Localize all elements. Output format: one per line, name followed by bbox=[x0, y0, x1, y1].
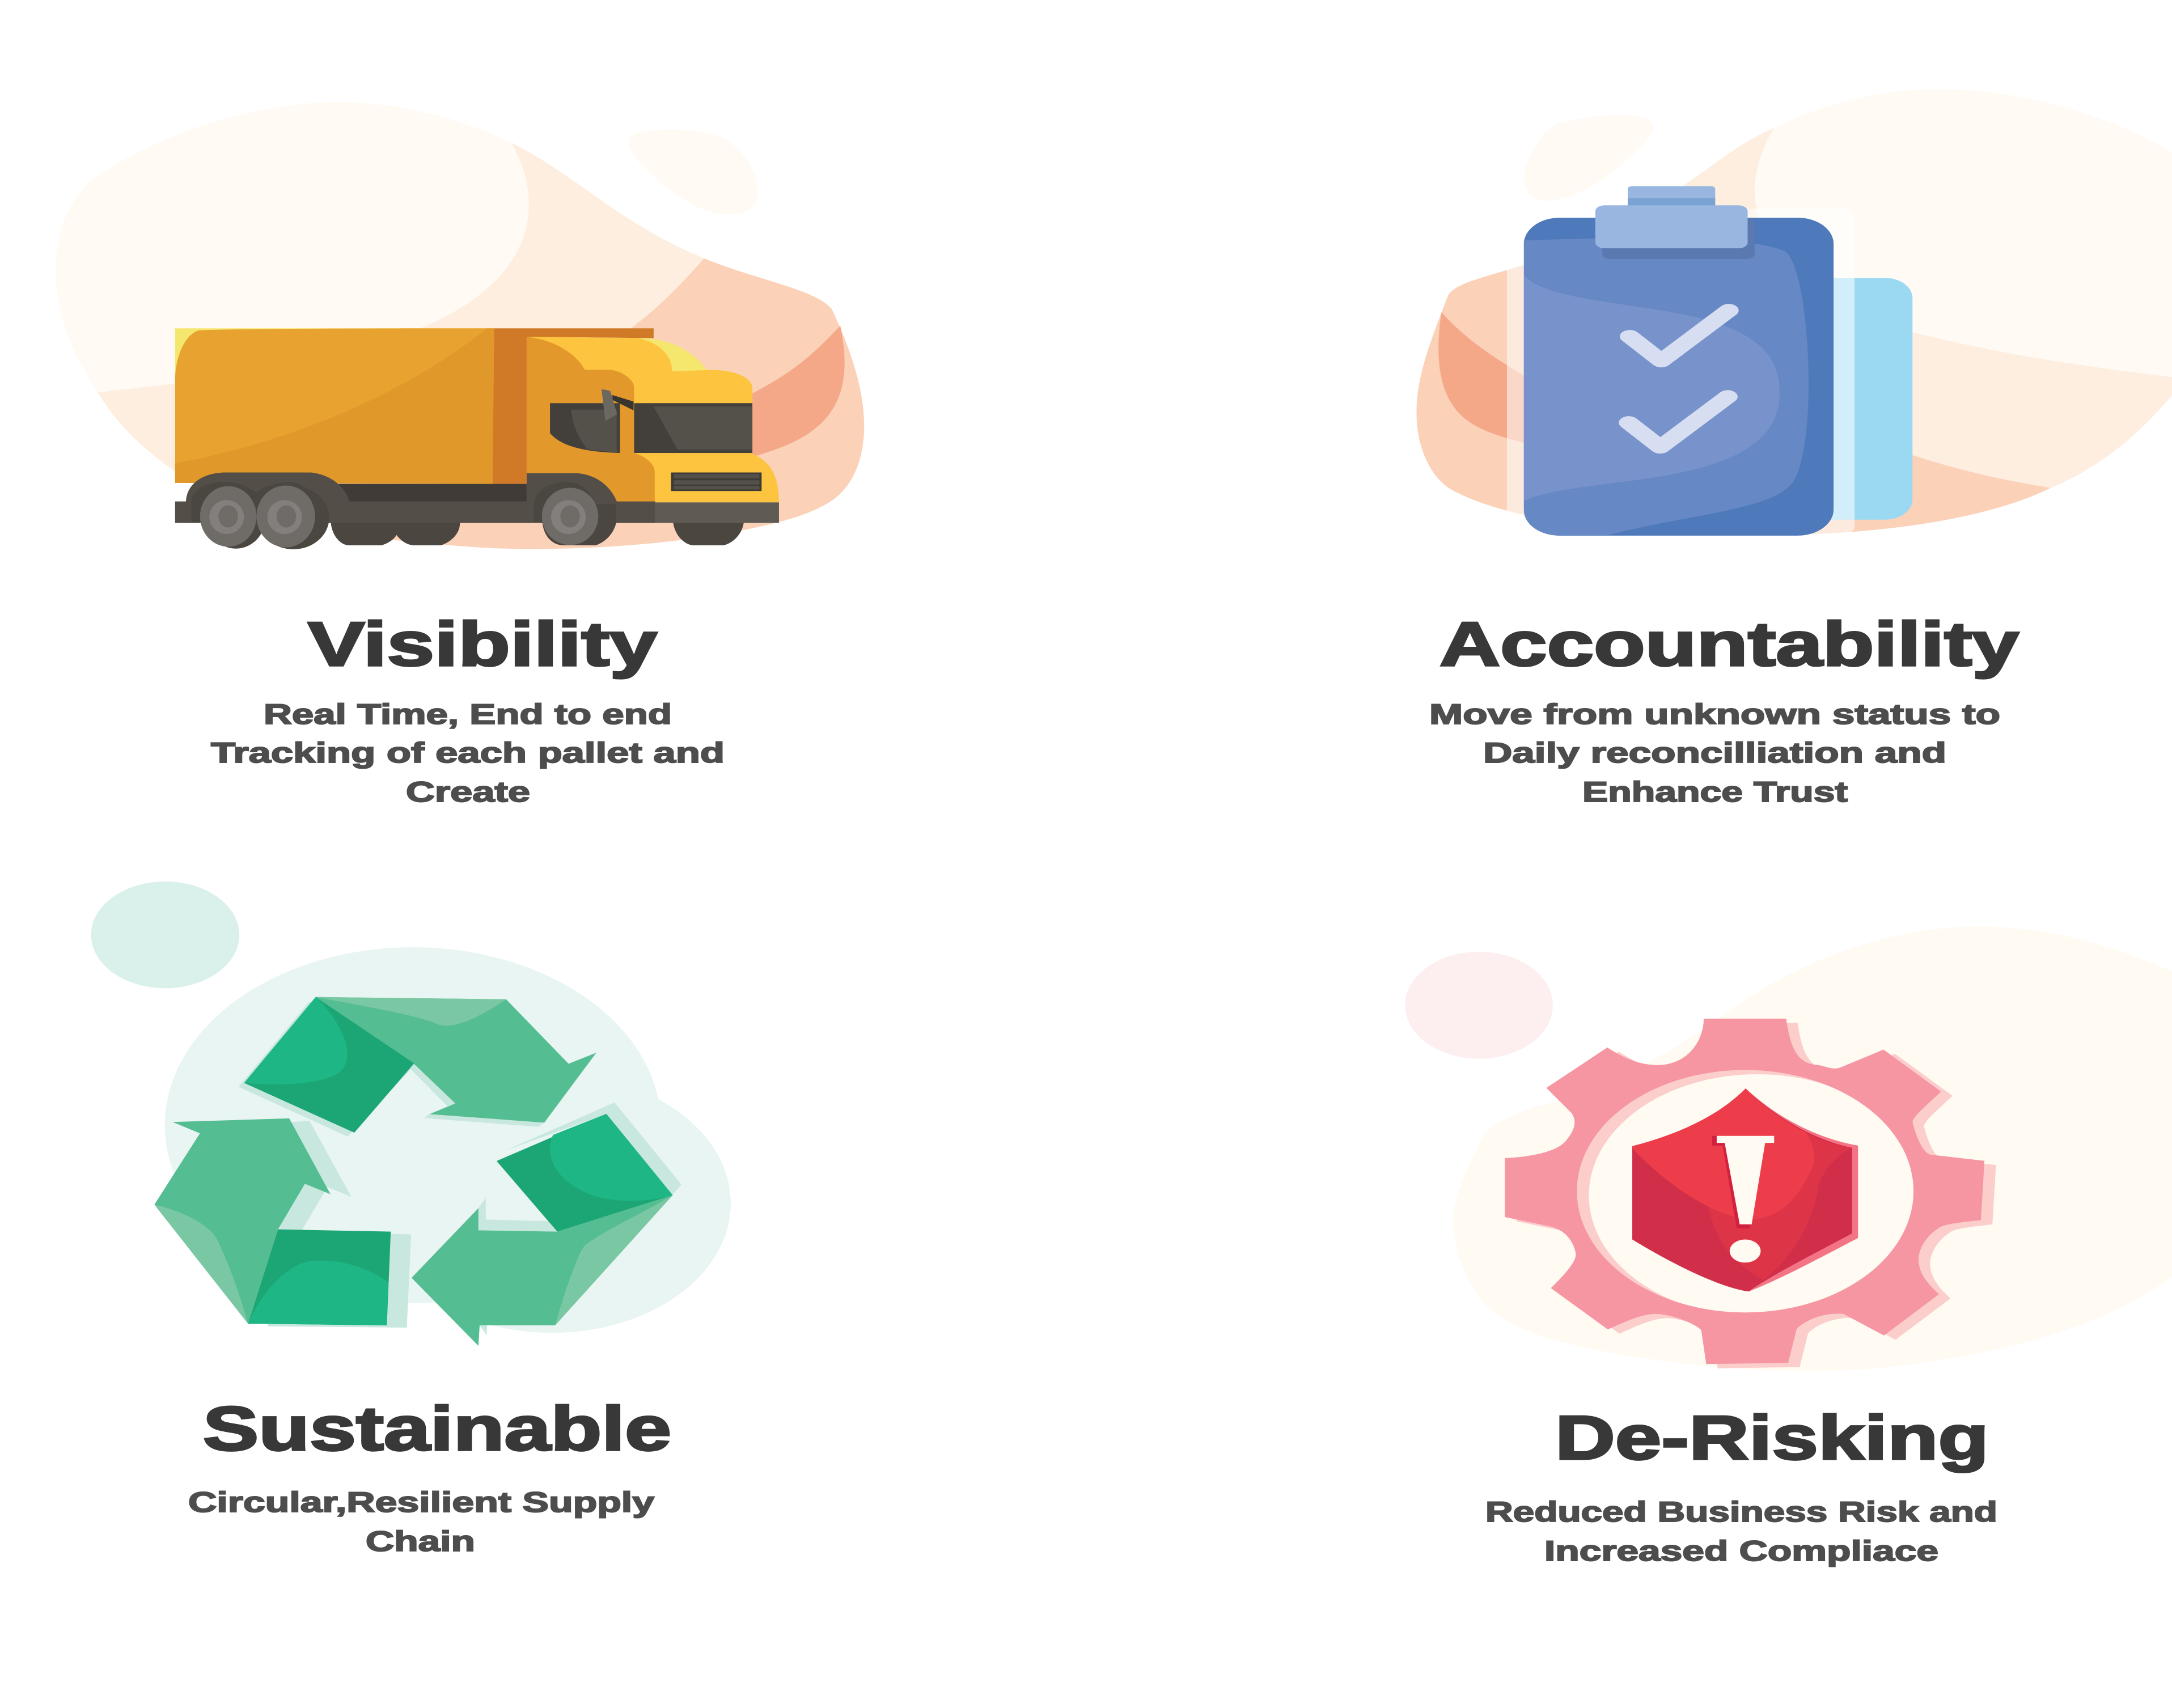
description: accountability: Enhance Trust bbox=[1582, 776, 1848, 808]
icon: clipboard with checks bbox=[1507, 186, 1912, 536]
icon: truck bbox=[175, 328, 779, 549]
description: sustainable bbox=[188, 1486, 654, 1557]
description: accountability: Move from unknown status to bbox=[1429, 698, 2000, 730]
description: de-risking: Increased Compliace bbox=[1544, 1535, 1938, 1567]
gear background blob bbox=[1405, 926, 2172, 1371]
icon: gear with warning shield bbox=[1505, 1019, 1996, 1368]
panel: sustainable bbox=[91, 881, 731, 1557]
description: sustainable: Circular,Resilient Supply bbox=[188, 1486, 654, 1518]
panel: accountability bbox=[1416, 89, 2172, 808]
description: de-risking: Reduced Business Risk and bbox=[1485, 1496, 1997, 1528]
heading: Accountability: Accountability bbox=[1439, 609, 2019, 679]
description: accountability bbox=[1429, 698, 2000, 808]
description: visibility: Tracking of each pallet and bbox=[211, 737, 725, 769]
description: visibility: Create bbox=[406, 776, 530, 808]
icon: recycle arrows bbox=[154, 997, 681, 1346]
description: de-risking bbox=[1485, 1496, 1997, 1567]
truck background blob bbox=[56, 102, 864, 549]
heading: De-Risking: De-Risking bbox=[1555, 1403, 1989, 1473]
clipboard background blob bbox=[1416, 89, 2172, 535]
panel: visibility bbox=[56, 102, 864, 808]
description: sustainable: Chain bbox=[366, 1525, 475, 1557]
heading: Visibility: Visibility bbox=[308, 609, 657, 679]
description: visibility bbox=[211, 698, 725, 808]
recycle background circles bbox=[91, 881, 731, 1333]
panel: de-risking bbox=[1405, 926, 2172, 1567]
description: visibility: Real Time, End to end bbox=[264, 698, 672, 730]
description: accountability: Daily reconcilliation and bbox=[1483, 737, 1946, 769]
heading: Sustainable: Sustainable bbox=[203, 1394, 671, 1464]
